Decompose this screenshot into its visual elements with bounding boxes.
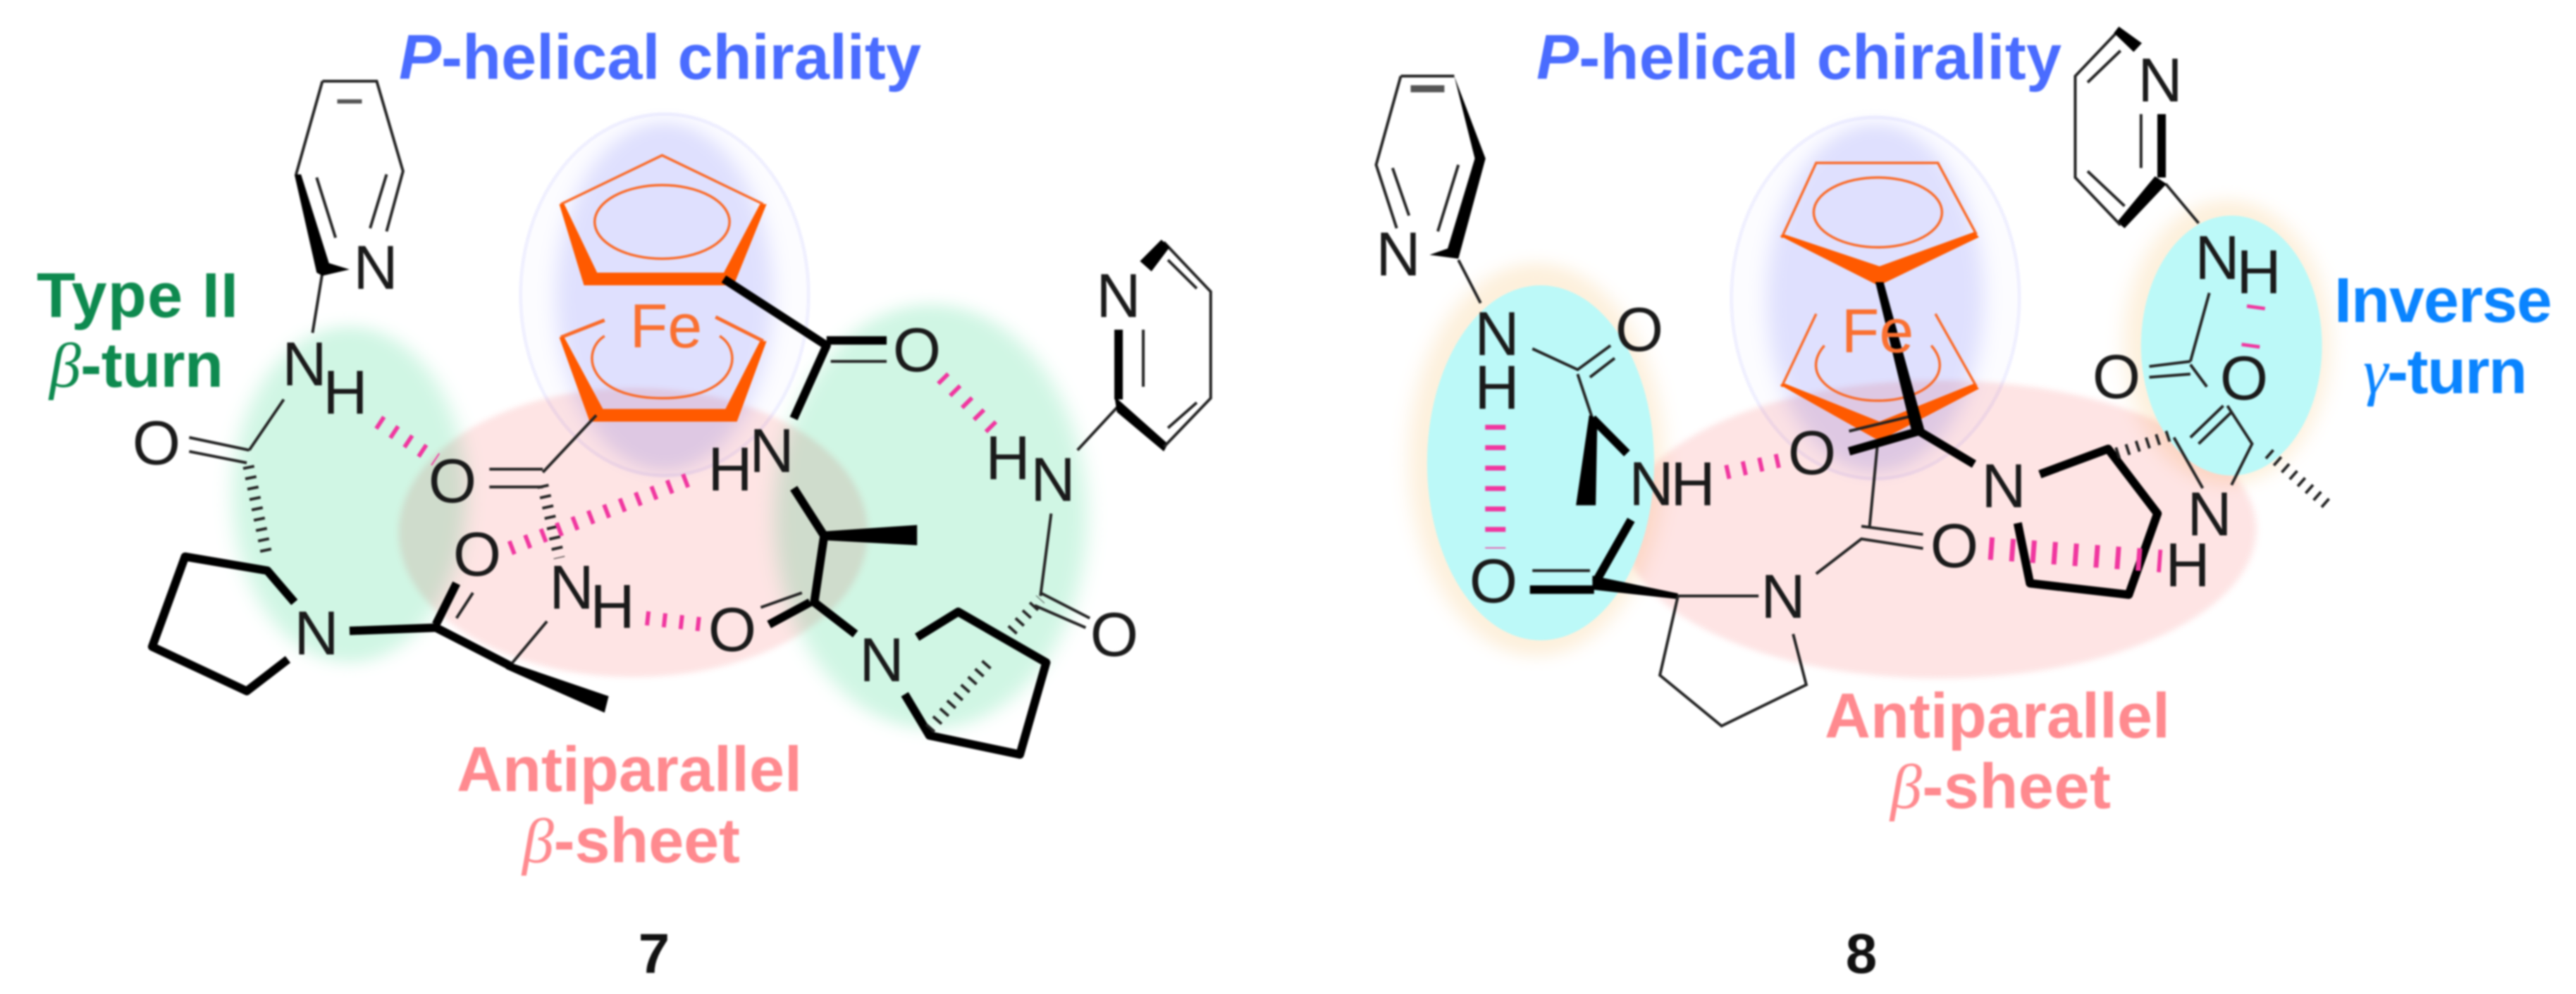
atom labels of 7: N [549,552,594,622]
atom labels of 8: H [1474,352,1520,422]
label: Antiparallel beta-sheet (8): Antiparallel [1825,681,2170,752]
compound number 8: 8 [1846,922,1877,985]
label: Antiparallel beta-sheet (8) [1825,681,2170,822]
molecular bonds of 8 [1376,27,2330,726]
atom labels of 8: H [1670,449,1715,518]
atom labels of 7 [133,232,1141,695]
atom labels of 8: O [2093,342,2140,411]
label: Antiparallel beta-sheet (7) [457,735,802,876]
atom labels of 8: N [1981,451,2026,521]
atom labels of 7: N [749,416,794,485]
atom labels of 8: H [2165,530,2210,599]
atom labels of 8: N [1376,219,1421,289]
panel: compound 8 [1376,23,2552,985]
atom labels of 8 [1376,45,2281,631]
atom labels of 7: O [893,315,941,385]
hydrogen bonds of 8 [1496,306,2256,561]
ferrocene core of 8 [1780,163,1979,439]
atom labels of 8: N [2195,223,2240,292]
heading: P-helical chirality (8): P-helical chirality [1536,23,2062,93]
label: Antiparallel beta-sheet (7): Antiparallel [457,735,802,805]
atom labels of 7: N [859,625,904,695]
molecular bonds of 7 [152,81,1211,754]
panel: compound 7 [37,23,1211,985]
atom labels of 8: O [1930,511,1978,580]
atom labels of 7: H [708,434,753,504]
label: Type II beta-turn: Type II [37,261,238,331]
label: Inverse gamma-turn: Inverse [2334,266,2552,336]
hydrogen bonds of 7 [378,378,995,625]
ferrocene core of 7 [560,156,767,422]
atom labels of 7: H [985,423,1030,492]
atom labels of 8: N [1761,561,1806,631]
atom labels of 8: O [1615,294,1663,364]
atom labels of 7: Fe [630,291,702,361]
atom labels of 8: O [1469,546,1517,616]
label: Antiparallel beta-sheet (8): β-sheet [1889,752,2111,822]
atom labels of 7: N [1096,261,1141,330]
atom labels of 7: O [133,408,180,478]
atom labels of 7: N [294,598,339,668]
atom labels of 8: O [1788,418,1836,487]
highlight zones for compound 7 [233,114,1087,729]
label: Type II beta-turn [37,261,238,401]
atom labels of 7: O [453,519,501,589]
label: Inverse gamma-turn: γ-turn [2363,337,2527,407]
atom labels of 8: N [2138,45,2183,115]
label: Antiparallel beta-sheet (7): β-sheet [521,806,740,876]
atom labels of 7: H [323,357,368,427]
label: Type II beta-turn: β-turn [48,330,223,401]
label: Inverse gamma-turn [2334,266,2552,407]
highlight zones for compound 8 [1409,117,2330,678]
atom labels of 8: N [2187,479,2232,549]
compound number 7: 7 [639,922,670,985]
atom labels of 8: O [2220,343,2268,413]
atom labels of 8: Fe [1842,296,1913,366]
heading: P-helical chirality (7): P-helical chirality [399,23,921,93]
atom labels of 8: N [1474,299,1520,368]
atom labels of 7: N [1030,445,1076,514]
atom labels of 8: N [1629,449,1674,518]
atom labels of 7: O [429,446,476,516]
atom labels of 7: H [590,571,635,641]
atom labels of 7: O [708,595,756,664]
atom labels of 7: N [282,329,327,399]
atom labels of 7: O [1090,599,1138,669]
atom labels of 7: N [353,232,398,302]
atom labels of 8: H [2236,237,2281,306]
